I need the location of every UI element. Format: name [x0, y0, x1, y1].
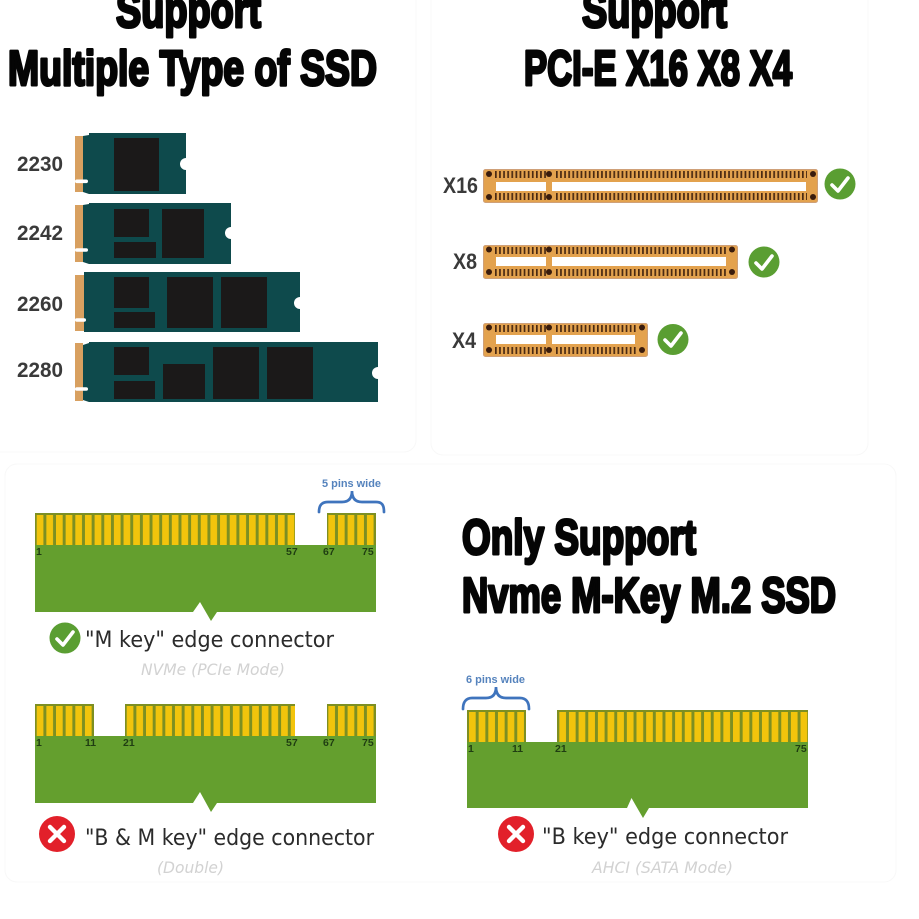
label: M key: "M key" edge connector	[85, 627, 335, 653]
label: M key	[50, 622, 335, 679]
SSD 2230: 2230	[17, 153, 63, 176]
icon: check X4	[658, 324, 688, 355]
slot X8	[453, 246, 738, 278]
icon: check X16	[824, 168, 856, 200]
SSD 2280: 2280	[17, 359, 63, 382]
slot X8: X8	[453, 249, 477, 274]
SSD 2230	[17, 133, 192, 194]
panel: PCI-E slots	[431, 0, 868, 455]
connector: B and M key: 1	[36, 737, 42, 749]
slot X4: X4	[452, 328, 477, 353]
slot X4	[452, 324, 648, 356]
slot X16: X16	[443, 173, 478, 198]
SSD 2242: 2242	[17, 222, 63, 245]
connector: B and M key: 67	[323, 737, 335, 749]
connector: B key: 6 pins wide	[466, 674, 525, 686]
connector: M key: 1	[36, 546, 42, 558]
label: B key	[498, 816, 789, 877]
title: support PCI-E	[524, 0, 792, 96]
title: only support NVMe M-key: Only Support	[462, 511, 696, 565]
connector: B and M key: 21	[123, 737, 135, 749]
title: support PCI-E: PCI-E X16 X8 X4	[524, 42, 792, 96]
icon: check X8	[748, 246, 780, 278]
connector: M key	[35, 478, 384, 621]
connector: M key: 57	[286, 546, 298, 558]
connector: B key: 11	[512, 743, 523, 755]
SSD 2280	[17, 342, 384, 402]
SSD 2260: 2260	[17, 293, 63, 316]
slot X16	[443, 170, 818, 202]
panel: SSD types	[0, 0, 416, 452]
connector: B and M key: 75	[362, 737, 374, 749]
title: support multiple SSD: Multiple Type of SSD	[8, 42, 377, 96]
connector: B and M key: 57	[286, 737, 298, 749]
title: support multiple SSD	[8, 0, 377, 96]
label: B key: AHCI (SATA Mode)	[591, 858, 733, 877]
connector: M key: 75	[362, 546, 374, 558]
connector: B key	[463, 674, 808, 818]
label: B and M key: "B & M key" edge connector	[85, 825, 375, 851]
label: M key: NVMe (PCIe Mode)	[141, 660, 285, 679]
SSD 2242	[17, 203, 237, 264]
connector: B key: 75	[795, 743, 807, 755]
label: B key: "B key" edge connector	[542, 824, 789, 850]
connector: M key: 5 pins wide	[322, 478, 381, 490]
connector: M key: 67	[323, 546, 335, 558]
SSD 2260	[17, 272, 306, 332]
title: only support NVMe M-key	[462, 511, 836, 623]
connector: B and M key	[35, 704, 376, 812]
label: B and M key: (Double)	[157, 858, 224, 877]
connector: B key: 1	[468, 743, 474, 755]
connector: B key: 21	[555, 743, 567, 755]
label: B and M key	[39, 816, 375, 877]
panel: edge connectors	[5, 464, 896, 882]
connector: B and M key: 11	[85, 737, 96, 749]
